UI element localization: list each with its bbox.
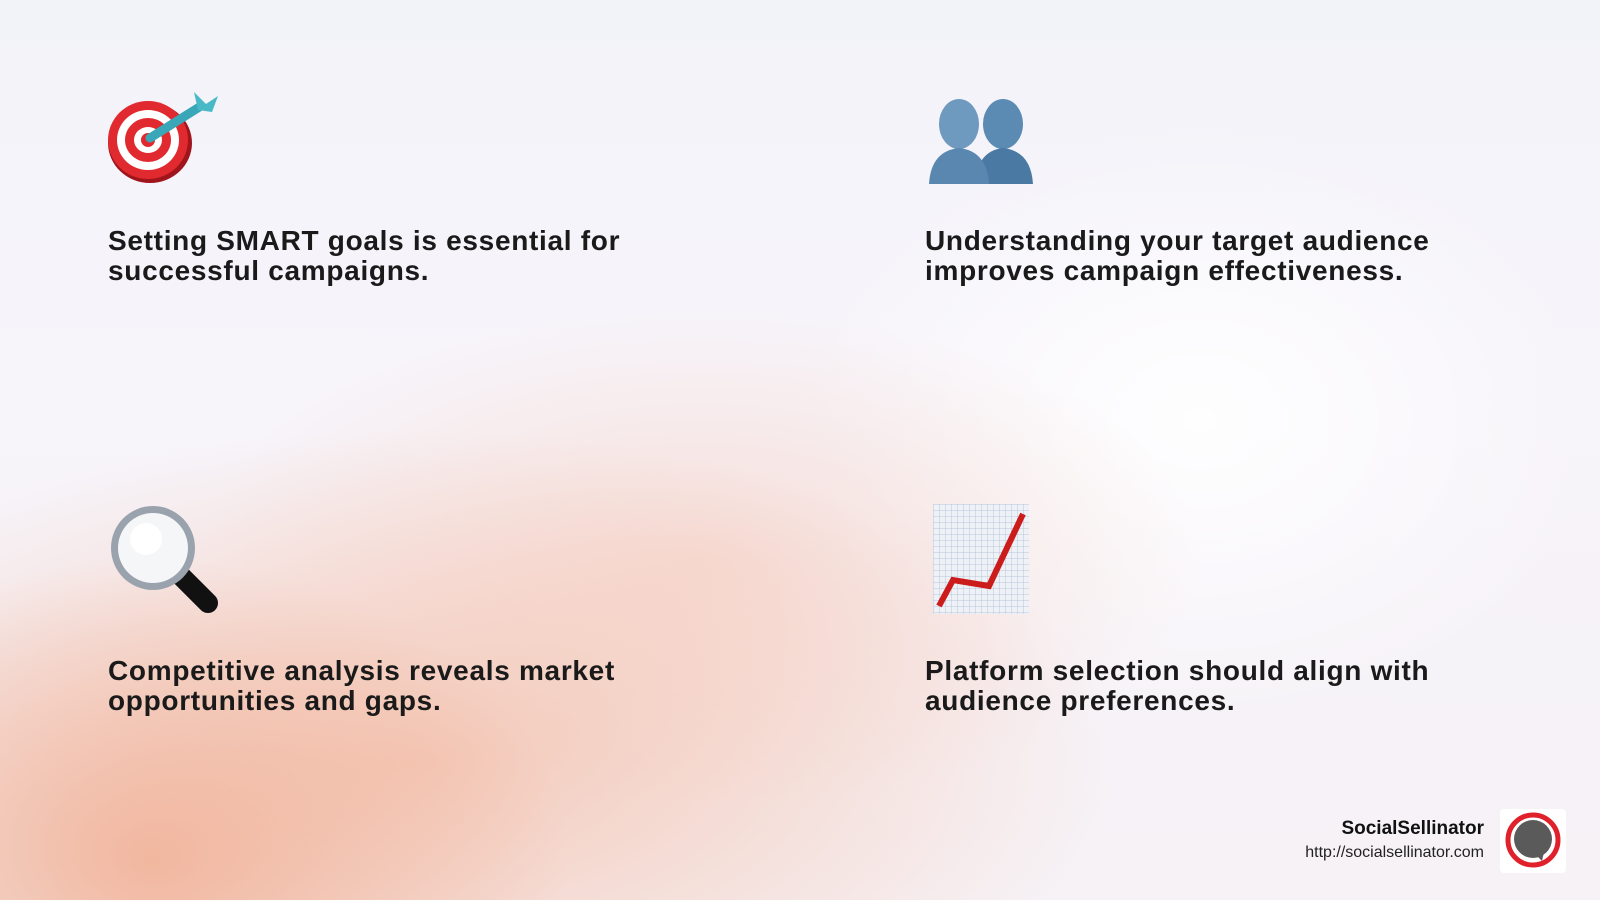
icon: two people	[929, 99, 1033, 184]
heading: target audience	[925, 225, 1430, 286]
icon: chart increasing	[933, 504, 1029, 614]
heading: target audience: improves campaign effectiveness.	[925, 255, 1403, 286]
heading: target audience: Understanding your target audience	[925, 225, 1430, 256]
heading: competitive analysis: opportunities and gaps.	[108, 685, 441, 716]
brand block	[1305, 809, 1566, 873]
heading: competitive analysis	[108, 655, 615, 716]
heading: platform selection	[925, 655, 1429, 716]
heading: competitive analysis: Competitive analysis reveals market	[108, 655, 615, 686]
brand name: SocialSellinator	[1341, 818, 1484, 839]
brand url: http://socialsellinator.com	[1305, 844, 1484, 861]
icon: magnifying glass	[111, 506, 218, 613]
logo	[1500, 809, 1566, 873]
icon: target with dart	[108, 92, 218, 183]
heading: platform selection: Platform selection should align with	[925, 655, 1429, 686]
heading: platform selection: audience preferences.	[925, 685, 1235, 716]
heading: smart goals	[108, 225, 620, 286]
heading: smart goals: successful campaigns.	[108, 255, 429, 286]
heading: smart goals: Setting SMART goals is essential for	[108, 225, 620, 256]
